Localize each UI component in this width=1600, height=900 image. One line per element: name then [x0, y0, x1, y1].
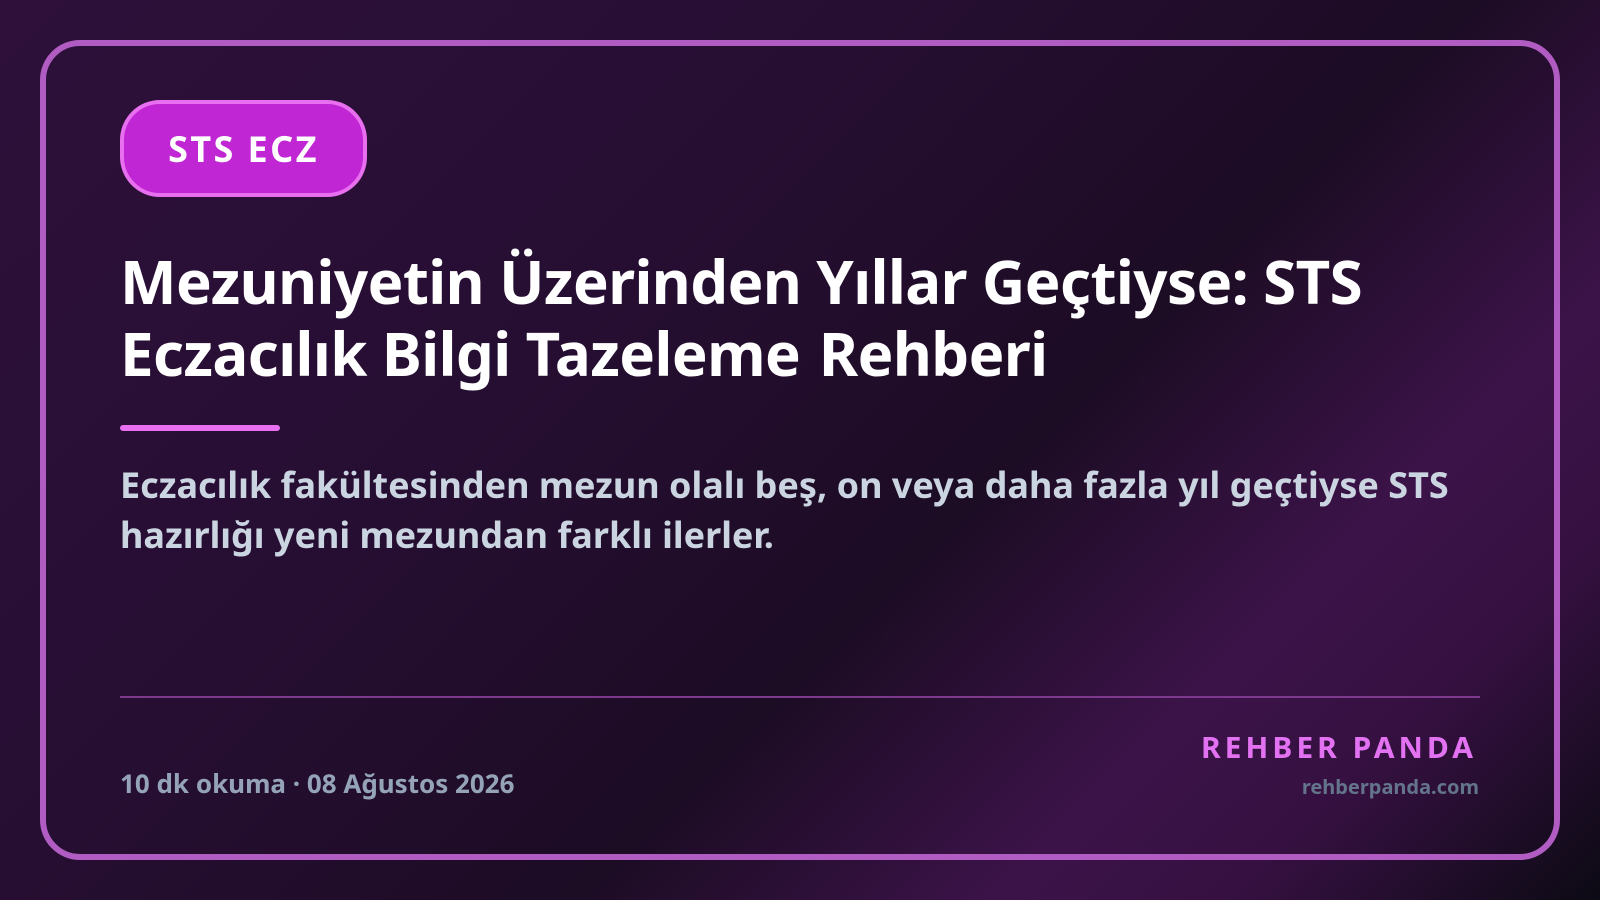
subtitle	[120, 460, 1449, 559]
title: Eczacılık Bilgi Tazeleme Rehberi	[120, 312, 1048, 394]
brand name: REHBER PANDA	[1201, 726, 1477, 767]
website url: rehberpanda.com	[1302, 773, 1479, 800]
title	[120, 240, 1362, 394]
subtitle: Eczacılık fakültesinden mezun olalı beş, on veya daha fazla yıl geçtiyse STS	[120, 460, 1449, 509]
title: Mezuniyetin Üzerinden Yıllar Geçtiyse: STS	[120, 240, 1362, 322]
reading time and date: 10 dk okuma · 08 Ağustos 2026	[120, 765, 515, 801]
badge: STS ECZ	[120, 100, 367, 197]
accent bar	[120, 425, 280, 431]
footer divider	[120, 696, 1480, 698]
badge: STS ECZ: STS ECZ	[168, 124, 319, 173]
subtitle: hazırlığı yeni mezundan farklı ilerler.	[120, 510, 774, 559]
